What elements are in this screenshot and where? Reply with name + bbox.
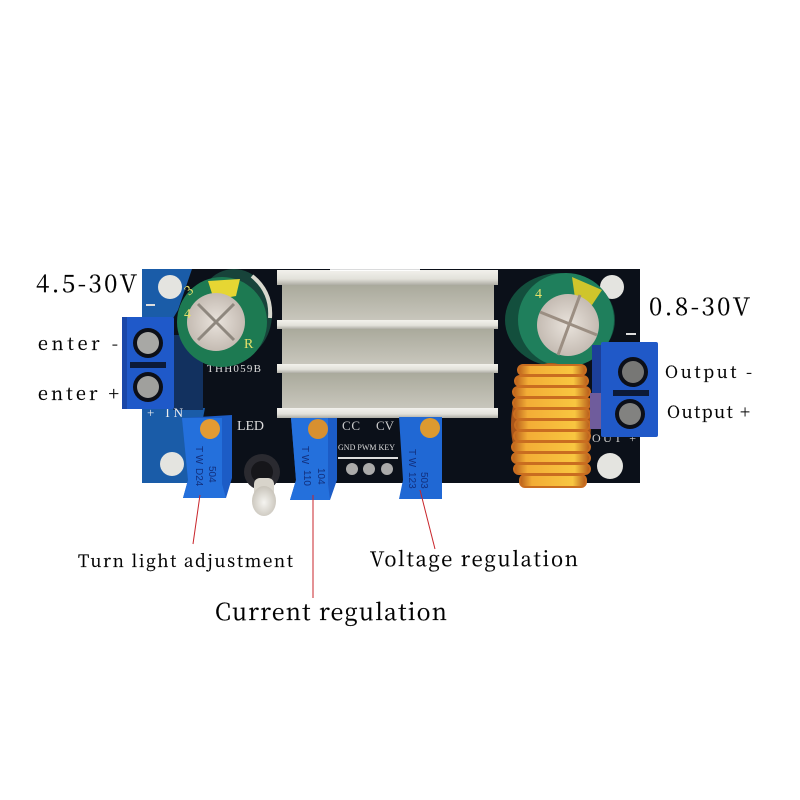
potentiometer: turn light: T W	[193, 446, 204, 465]
potentiometer: current: 110	[301, 470, 312, 486]
potentiometer: voltage: T W	[406, 449, 417, 468]
label: enter minus: enter -	[38, 330, 118, 356]
mounting holes	[158, 275, 624, 479]
potentiometer: turn light: 504	[206, 466, 217, 483]
label: voltage regulation: Voltage regulation	[370, 543, 578, 572]
label: turn light adjustment: Turn light adjustment	[78, 547, 294, 572]
board markings: CV	[376, 418, 395, 433]
potentiometer: current	[290, 418, 337, 500]
callout line: turn light	[193, 495, 200, 544]
board markings	[146, 304, 636, 452]
inductor coil	[511, 363, 591, 487]
output terminal block	[590, 342, 658, 437]
board markings: + IN	[147, 405, 184, 420]
module board	[142, 269, 640, 483]
potentiometer: voltage: 123	[406, 472, 417, 489]
label: input voltage: 4.5-30V	[36, 264, 137, 299]
potentiometer: current: 104	[315, 468, 326, 485]
potentiometer: current: T W	[299, 446, 310, 465]
label: output plus: Output +	[667, 398, 750, 423]
potentiometer: voltage	[399, 417, 442, 499]
input terminal block	[122, 317, 174, 409]
board markings: OUT +	[592, 431, 636, 445]
label: output minus: Output -	[665, 358, 752, 383]
left capacitor	[177, 269, 272, 367]
potentiometer: turn light	[182, 415, 232, 498]
label: enter plus: enter +	[38, 380, 119, 406]
test pads	[338, 457, 398, 475]
right capacitor: 4	[535, 287, 542, 302]
board markings: LED	[237, 419, 264, 434]
circuit board	[142, 269, 640, 483]
label: output voltage: 0.8-30V	[649, 287, 750, 322]
left capacitor: 3	[182, 283, 197, 299]
potentiometer: turn light: D24	[193, 468, 204, 487]
callout line: voltage	[420, 490, 435, 549]
left capacitor: 4	[184, 307, 191, 322]
potentiometer: voltage: 503	[418, 472, 429, 489]
LED	[244, 454, 280, 516]
board markings: GND PWM KEY	[338, 443, 395, 452]
heatsink	[277, 266, 498, 418]
right capacitor	[505, 273, 615, 367]
left capacitor: R	[244, 337, 254, 352]
callout line: current	[312, 495, 314, 598]
label: current regulation: Current regulation	[215, 594, 447, 627]
board markings: CC	[342, 418, 360, 433]
board markings: THH059B	[207, 363, 261, 375]
